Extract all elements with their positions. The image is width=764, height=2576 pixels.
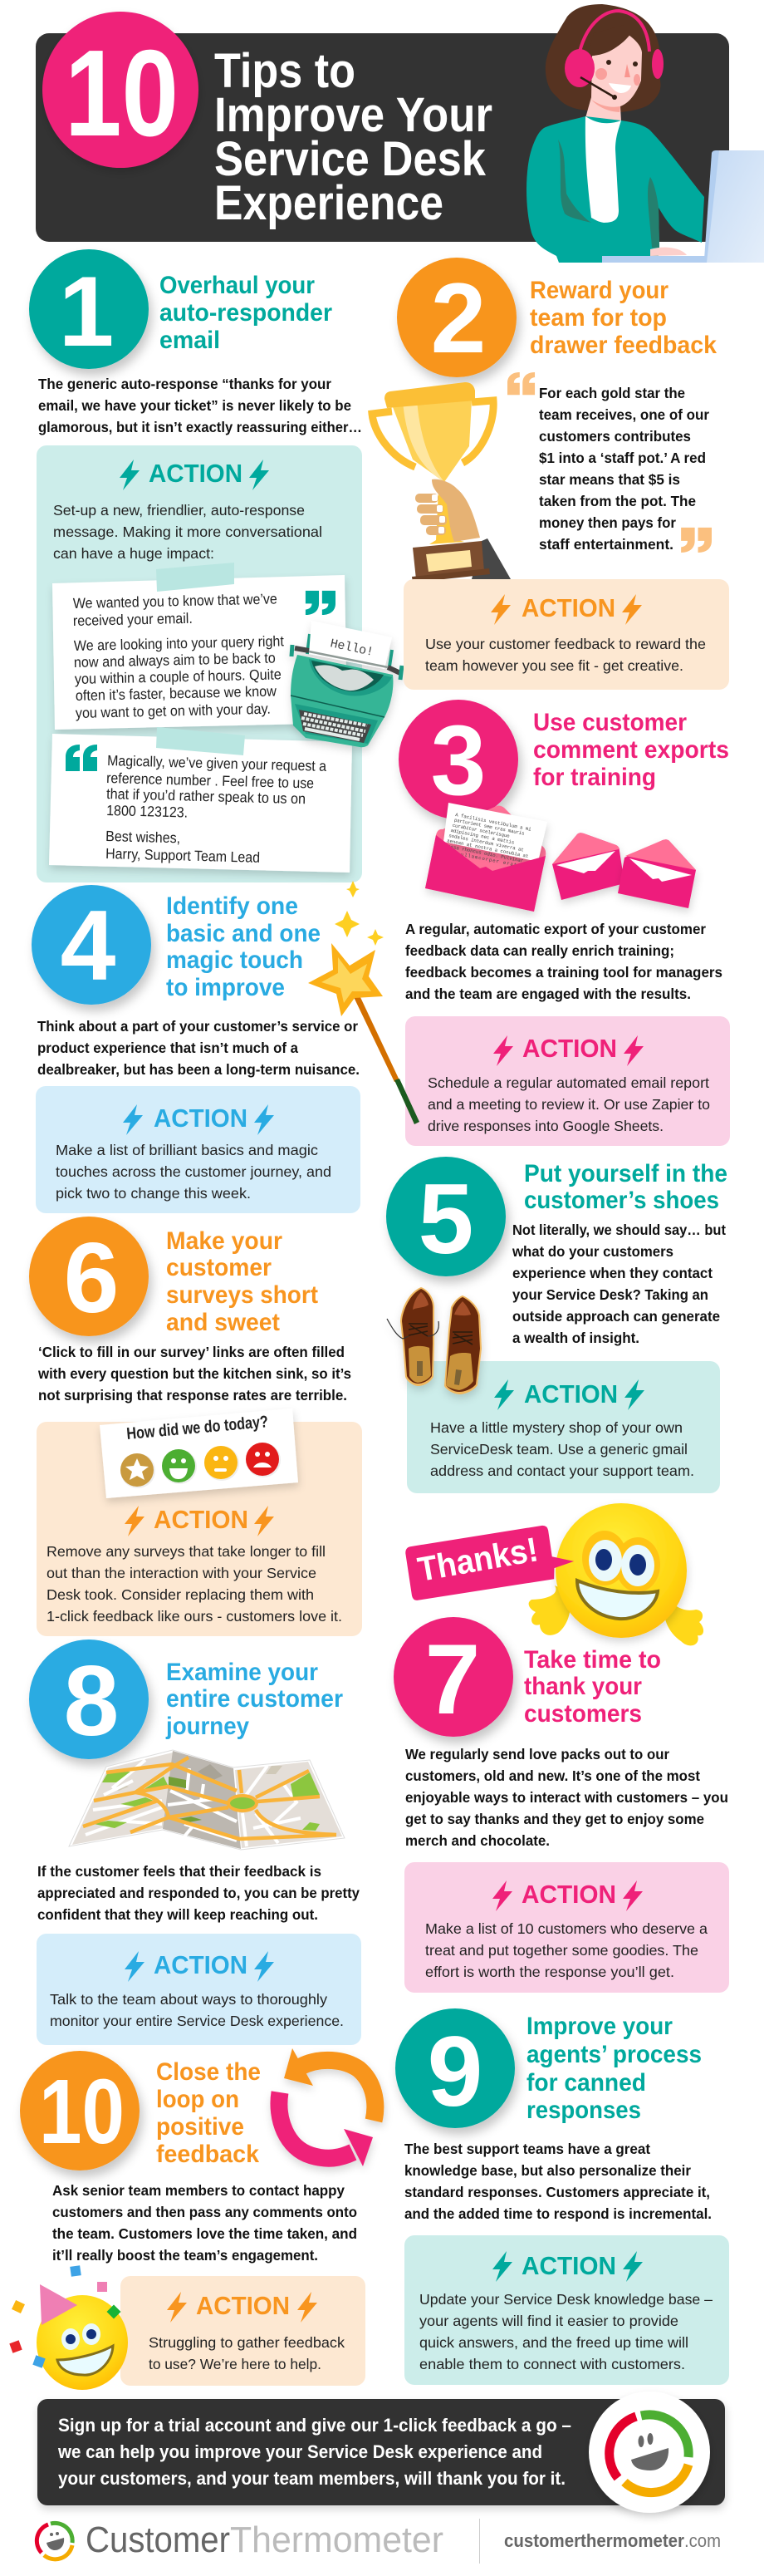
action heading: ACTION (154, 1505, 248, 1534)
heading: tip 9: for canned (526, 2069, 646, 2097)
action text (425, 636, 706, 674)
heading: tip 3 (533, 709, 729, 791)
badge: number 3: 3 (431, 705, 486, 816)
title: Tips to (214, 44, 355, 98)
badge: number 8: 8 (64, 1645, 119, 1757)
email card: second message (49, 727, 352, 873)
action box: tip 7 (404, 1862, 729, 1993)
heading: tip 6: customer (166, 1254, 272, 1281)
action heading (494, 1379, 644, 1410)
text block: tip 7: We regularly send love packs out to our (405, 1746, 669, 1762)
action box: tip 4 (36, 1086, 360, 1213)
email card: second message: Best wishes, (105, 828, 180, 846)
quote text: money then pays for (539, 514, 676, 531)
panel: tip 1 (29, 249, 402, 882)
text block: tip 5: your Service Desk? Taking an (512, 1286, 708, 1303)
badge: number 5 (386, 1157, 506, 1276)
panel: tip 10 (9, 2048, 375, 2390)
action text: Use your customer feedback to reward the (425, 636, 706, 652)
heading: tip 2: drawer feedback (530, 332, 717, 359)
heading: tip 7 (524, 1646, 661, 1728)
action text: can have a huge impact: (53, 545, 214, 562)
action box: tip 1 (37, 445, 402, 882)
action text: treat and put together some goodies. The (425, 1942, 698, 1959)
action text: Desk took. Consider replacing them with (47, 1586, 314, 1603)
icon: agent with headset at laptop (526, 4, 764, 263)
heading: tip 7: thank your (524, 1673, 642, 1700)
icon: envelopes: parturient sem cras mauris (453, 817, 525, 837)
quote text: customers contributes (539, 428, 691, 445)
action box: tip 5 (407, 1361, 720, 1493)
footer logo (37, 2519, 721, 2564)
survey card (100, 1408, 298, 1498)
panel: tip 3 (399, 700, 730, 1146)
quote text: $1 into a ‘staff pot.’ A red (539, 450, 706, 466)
heading: tip 1 (159, 272, 332, 354)
icon: logo mark (37, 2523, 72, 2559)
text block: tip 6: ‘Click to fill in our survey’ links are often filled (38, 1344, 345, 1360)
icon: opening quote (507, 372, 535, 395)
heading: tip 10 (156, 2058, 261, 2168)
heading: tip 1: auto-responder (159, 299, 332, 327)
heading: tip 4: to improve (166, 974, 285, 1001)
text block: tip 6: not surprising that response rates are terrible. (38, 1387, 347, 1404)
icon: envelopes: massa rhoncus odio. Pulvinar (444, 843, 524, 864)
text block: tip 7: merch and chocolate. (405, 1832, 550, 1849)
text block: tip 8: If the customer feels that their feedback is (37, 1863, 321, 1880)
text block: tip 4 (37, 1018, 360, 1078)
title (214, 44, 492, 230)
text block: tip 5: what do your customers (512, 1243, 673, 1260)
text block: tip 3: feedback becomes a training tool for managers (405, 964, 722, 981)
title: Improve Your (214, 88, 492, 142)
badge: number 7 (394, 1617, 513, 1737)
heading: tip 2: Reward your (530, 277, 668, 304)
text block: tip 10: Ask senior team members to contact happy (52, 2182, 345, 2199)
action heading: ACTION (154, 1950, 247, 1979)
badge: number 6: 6 (64, 1222, 119, 1334)
action heading (167, 2291, 317, 2323)
action text: message. Making it more conversational (53, 524, 322, 540)
action heading (125, 1950, 274, 1982)
badge: number 9: 9 (428, 2016, 482, 2127)
text block: tip 10 (52, 2182, 357, 2264)
text block: tip 4: Think about a part of your customer’s service or (37, 1018, 358, 1035)
text block: tip 8: appreciated and responded to, you can be pretty (37, 1885, 360, 1901)
panel: tip 2 (372, 258, 729, 690)
icon: envelopes: sodales interdum viverra at (448, 833, 524, 853)
action text: Make a list of 10 customers who deserve a (425, 1920, 708, 1937)
heading: tip 9: Improve your (526, 2013, 673, 2040)
text block: tip 10: it’ll really boost the team’s engagement. (52, 2247, 318, 2264)
action heading (125, 1505, 274, 1536)
action heading: ACTION (196, 2291, 290, 2320)
action text: Struggling to gather feedback (149, 2334, 345, 2351)
action text (428, 1074, 710, 1134)
heading: tip 4: Identify one (166, 892, 298, 920)
action text: Remove any surveys that take longer to fill (47, 1543, 326, 1560)
heading: tip 10: positive (156, 2113, 244, 2141)
badge: number 9 (395, 2008, 515, 2128)
heading: tip 7: Take time to (524, 1646, 661, 1674)
heading: tip 6: and sweet (166, 1309, 280, 1336)
heading: tip 8: Examine your (166, 1659, 318, 1686)
action text: Schedule a regular automated email report (428, 1074, 709, 1091)
action text: 1-click feedback like ours - customers love it. (47, 1608, 342, 1625)
email card: first message: received your email. (73, 610, 193, 629)
action text: address and contact your support team. (430, 1463, 694, 1479)
action heading (493, 1034, 644, 1066)
text block: tip 3 (405, 921, 722, 1002)
email card: first message: you within a couple of hours. Quite (75, 666, 282, 687)
title: Experience (214, 176, 443, 230)
action text: your agents will find it easier to provide (419, 2313, 678, 2329)
heading: tip 1: email (159, 327, 220, 354)
heading: tip 10: Close the (156, 2058, 261, 2086)
action heading (120, 459, 269, 490)
icon: smiley with waving hands (529, 1503, 703, 1645)
email card: first message: We wanted you to know that we’ve (73, 590, 277, 612)
text block: tip 9: knowledge base, but also personalize their (404, 2162, 691, 2179)
icon: envelopes (425, 803, 696, 912)
title: Service Desk (214, 132, 487, 186)
badge: number 10: 10 (39, 2061, 125, 2163)
text block: tip 7: customers, old and new. It’s one of the most (405, 1767, 700, 1784)
badge: number 5: 5 (419, 1163, 473, 1275)
text block: tip 9 (404, 2141, 712, 2222)
panel: tip 9 (395, 2008, 729, 2385)
heading: tip 10: loop on (156, 2086, 239, 2113)
email card: second message: reference number . Feel free to use (106, 769, 314, 792)
panel: tip 4 (32, 881, 419, 1213)
icon: envelopes: aenean at nostra a conubia at (446, 838, 529, 859)
quote text: team receives, one of our (539, 406, 709, 423)
action text (425, 1920, 708, 1980)
panel: tip 6 (29, 1217, 362, 1636)
panel: tip 7 (394, 1503, 729, 1993)
heading: tip 3: for training (533, 764, 656, 791)
action text: out than the interaction with your Service (47, 1565, 316, 1581)
action heading: ACTION (522, 593, 615, 622)
badge: number 1 (29, 249, 149, 369)
text block: tip 8 (37, 1863, 360, 1923)
text block: tip 5: experience when they contact (512, 1265, 713, 1281)
icon: envelopes: adipiscing nec a mattis (450, 828, 515, 846)
action heading: ACTION (522, 1880, 616, 1909)
website address: customerthermometer (504, 2530, 684, 2551)
email card: second message: Harry, Support Team Lead (105, 845, 260, 866)
text block: tip 1 intro (38, 376, 362, 435)
icon: closing quote (681, 528, 712, 553)
badge: number 8 (29, 1639, 149, 1759)
heading: tip 2 (530, 277, 717, 359)
icon: typewriter (291, 621, 402, 747)
action text: Have a little mystery shop of your own (430, 1419, 683, 1436)
heading: tip 3: Use customer (533, 709, 687, 736)
heading: tip 8 (165, 1659, 343, 1740)
text block: tip 5: Not literally, we should say… but (512, 1222, 726, 1238)
text block: tip 6: with every question but the kitchen sink, so it’s (37, 1365, 351, 1382)
text block: tip 1 intro: The generic auto-response “thanks for your (38, 376, 331, 392)
heading: tip 9 (526, 2013, 702, 2124)
icon: yellow face (204, 1446, 239, 1481)
action text: and a meeting to review it. Or use Zapier to (428, 1096, 710, 1113)
heading: tip 5: customer’s shoes (524, 1187, 719, 1214)
action text (419, 2291, 713, 2372)
text block: tip 7 (405, 1746, 728, 1849)
text block: tip 7: get to say thanks and they get to enjoy some (405, 1811, 704, 1827)
heading: tip 8: journey (165, 1713, 250, 1740)
action text: drive responses into Google Sheets. (428, 1118, 664, 1134)
action heading (492, 1880, 643, 1911)
action text: Make a list of brilliant basics and magic (56, 1142, 318, 1158)
callout: Thanks speech bubble (404, 1524, 575, 1600)
survey card: How did we do today? (126, 1413, 269, 1443)
icon: pair of shoes (387, 1287, 482, 1394)
wordmark: Customer (86, 2519, 230, 2560)
badge: number 7: 7 (425, 1624, 480, 1735)
text block: tip 3: feedback data can really enrich training; (405, 942, 674, 959)
action heading (491, 593, 642, 625)
heading: tip 6: Make your (166, 1227, 282, 1255)
action heading: ACTION (154, 1104, 247, 1133)
website address: .com (684, 2530, 721, 2551)
badge: number 4 (32, 885, 151, 1005)
heading: tip 8: entire customer (166, 1685, 343, 1713)
action text (430, 1419, 694, 1479)
text block: tip 4: product experience that isn’t much of a (37, 1040, 298, 1056)
text block: tip 5: outside approach can generate (512, 1308, 720, 1325)
icon: gold star face (120, 1453, 155, 1488)
text block: tip 9: standard responses. Customers appreciate it, (404, 2184, 710, 2200)
heading: tip 1: Overhaul your (159, 272, 315, 299)
badge: number 2: 2 (431, 263, 486, 374)
heading: tip 6: surveys short (166, 1281, 318, 1309)
icon: typewriter: Hello! (329, 637, 375, 660)
text block: tip 6 (37, 1344, 351, 1404)
text block: tip 5: a wealth of insight. (512, 1330, 639, 1346)
action text: Set-up a new, friendlier, auto-response (53, 502, 305, 519)
heading: tip 4: magic touch (166, 946, 303, 974)
email card: first message: often it’s faster, because we know (76, 683, 277, 704)
icon: green face (162, 1449, 197, 1484)
action heading: ACTION (149, 459, 242, 488)
text block: tip 1 intro: email, we have your ticket” is never likely to be (38, 397, 351, 414)
action text: team however you see fit - get creative. (425, 657, 683, 674)
wordmark: Thermometer (230, 2519, 443, 2560)
call to action text: your customers, and your team members, will thank you for it. (58, 2468, 566, 2489)
text block: tip 1 intro: glamorous, but it isn’t exactly reassuring either… (38, 419, 362, 435)
action text: pick two to change this week. (56, 1185, 251, 1202)
call to action text: Sign up for a trial account and give our 1-click feedback a go – (58, 2415, 571, 2436)
icon: red face (246, 1443, 281, 1477)
action text (56, 1142, 331, 1202)
action box: tip 2 (404, 579, 729, 690)
heading: tip 5: Put yourself in the (524, 1160, 727, 1187)
icon: envelopes: curabitur scelerisque (452, 823, 511, 839)
wordmark (86, 2519, 443, 2560)
heading: tip 9: agents’ process (526, 2041, 702, 2068)
icon: loop arrows (279, 2048, 375, 2166)
icon: magic wand (308, 881, 419, 1124)
action text: monitor your entire Service Desk experience. (50, 2013, 344, 2029)
text block: tip 10: the team. Customers love the time taken, and (52, 2225, 357, 2242)
callout: Thanks speech bubble: Thanks! (415, 1530, 541, 1589)
badge: number 10: 10 (65, 25, 179, 162)
badge: number 4: 4 (61, 890, 116, 1001)
icon: smiling logo badge (589, 2392, 710, 2513)
action heading (492, 2251, 643, 2282)
action text (50, 1991, 344, 2029)
action text (53, 502, 322, 562)
call to action banner (37, 2392, 725, 2513)
text block: tip 4: dealbreaker, but has been a long-term nuisance. (37, 1061, 360, 1078)
action heading: ACTION (522, 2251, 616, 2280)
action text: effort is worth the response you’ll get. (425, 1964, 674, 1980)
badge: number 6 (29, 1217, 149, 1336)
quote text (539, 385, 709, 553)
action heading: ACTION (522, 1034, 617, 1063)
quote text: staff entertainment. (539, 536, 673, 553)
icon: envelopes: A facilisis vestibulum a mi (455, 812, 532, 833)
heading: tip 6 (166, 1227, 318, 1336)
text block: tip 9: and the added time to respond is incremental. (404, 2205, 712, 2222)
icon: trophy in hand (372, 382, 511, 583)
action text: ServiceDesk team. Use a generic gmail (430, 1441, 688, 1458)
call to action text: we can help you improve your Service Desk experience and (57, 2441, 542, 2462)
action box: tip 3 (405, 1016, 730, 1146)
badge: number 2 (397, 258, 517, 377)
email card: first message: you want to get on with your day. (76, 701, 271, 721)
action box: tip 8 (37, 1934, 361, 2045)
action text: touches across the customer journey, and (56, 1163, 331, 1180)
action box: tip 10 (120, 2276, 365, 2386)
text block: tip 7: enjoyable ways to interact with customers – you (405, 1789, 728, 1806)
action text (149, 2334, 345, 2372)
icon: folded map (69, 1750, 345, 1850)
heading: tip 5 (524, 1160, 727, 1214)
icon: envelopes: nisi ullamcorper erat (443, 848, 517, 868)
heading: tip 10: feedback (156, 2141, 260, 2168)
email card: second message: Magically, we’ve given your request a (107, 752, 327, 774)
email card: first message: now and always aim to be back to (74, 649, 276, 671)
text block: tip 10: customers and then pass any comments onto (52, 2204, 357, 2220)
action heading (123, 1104, 274, 1135)
quote text: For each gold star the (539, 385, 685, 401)
email card: second message: that if you’d rather speak to us on (106, 785, 306, 807)
heading: tip 4 (166, 892, 321, 1001)
action box: tip 9 (404, 2235, 729, 2385)
action text: Talk to the team about ways to thoroughly (50, 1991, 327, 2008)
panel: tip 8 (29, 1639, 361, 2045)
icon: party smiley with confetti (9, 2265, 128, 2390)
text block: tip 3: and the team are engaged with the results. (405, 986, 691, 1002)
action text: quick answers, and the freed up time will (419, 2334, 688, 2351)
quote text: star means that $5 is (539, 471, 680, 488)
action box: tip 6 (37, 1408, 362, 1636)
text block: tip 8: confident that they will keep reaching out. (37, 1906, 318, 1923)
panel: tip 5 (386, 1157, 727, 1493)
action text: to use? We’re here to help. (149, 2356, 321, 2372)
heading: tip 7: customers (524, 1700, 642, 1728)
quote text: taken from the pot. The (539, 493, 696, 509)
heading: tip 3: comment exports (533, 736, 729, 764)
action heading: ACTION (524, 1379, 618, 1408)
badge: number 1: 1 (59, 256, 114, 367)
email card: first message (52, 563, 347, 730)
heading: tip 9: responses (526, 2097, 641, 2124)
text block: tip 5 (512, 1222, 726, 1346)
call to action text (57, 2415, 571, 2489)
text block: tip 3: A regular, automatic export of your customer (405, 921, 706, 937)
email card: first message: We are looking into your query right (74, 632, 284, 654)
action text: Update your Service Desk knowledge base – (419, 2291, 713, 2308)
action text: enable them to connect with customers. (419, 2356, 685, 2372)
heading: tip 2: team for top (530, 304, 667, 332)
text block: tip 9: The best support teams have a great (404, 2141, 650, 2157)
email card: second message: 1800 123123. (106, 802, 188, 821)
badge: number 3 (399, 700, 518, 819)
heading: tip 4: basic and one (166, 920, 321, 947)
header panel (36, 4, 764, 263)
action text (47, 1543, 342, 1625)
